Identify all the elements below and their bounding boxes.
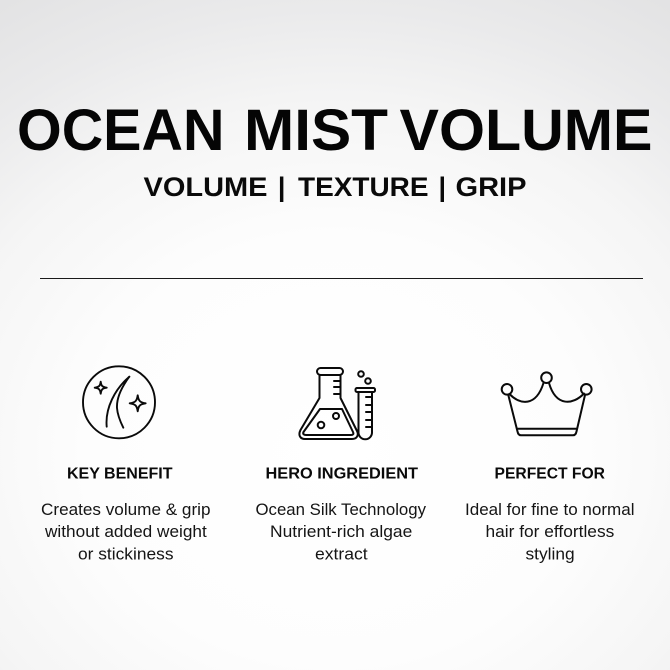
subtitle: TEXTURE: [298, 172, 428, 202]
heading: perfect for: PERFECT FOR: [494, 465, 605, 482]
text: perfect for description: [465, 501, 634, 564]
heading: hero ingredient: HERO INGREDIENT: [266, 465, 419, 482]
text: key benefit description: [41, 501, 211, 564]
column: hero ingredient: [256, 367, 427, 564]
column: perfect for: [465, 371, 634, 564]
icon: crown: [500, 371, 593, 436]
subtitle: GRIP: [456, 172, 526, 202]
text: hero ingredient description: Nutrient-rich algae: [270, 523, 412, 541]
icon: flask and test tube: [298, 367, 376, 440]
subtitle: VOLUME: [144, 172, 268, 202]
subtitle: [144, 172, 526, 202]
text: perfect for description: Ideal for fine to normal: [465, 501, 634, 519]
text: key benefit description: or stickiness: [78, 546, 174, 564]
title: VOLUME: [400, 98, 652, 163]
text: hero ingredient description: Ocean Silk Technology: [256, 501, 427, 519]
title: [17, 98, 652, 163]
heading: key benefit: KEY BENEFIT: [67, 465, 173, 482]
icon: hair strand with sparkles: [82, 365, 156, 440]
column: key benefit: [41, 365, 211, 564]
text: hero ingredient description: [256, 501, 427, 564]
title: OCEAN: [17, 98, 224, 163]
title: MIST: [244, 98, 388, 163]
text: key benefit description: without added weight: [44, 523, 207, 541]
text: key benefit description: Creates volume & grip: [41, 501, 211, 519]
subtitle: |: [439, 172, 446, 202]
text: perfect for description: styling: [526, 546, 575, 564]
text: perfect for description: hair for effortless: [486, 523, 614, 541]
divider line: [40, 278, 643, 279]
subtitle: |: [278, 172, 285, 202]
text: hero ingredient description: extract: [315, 546, 368, 564]
